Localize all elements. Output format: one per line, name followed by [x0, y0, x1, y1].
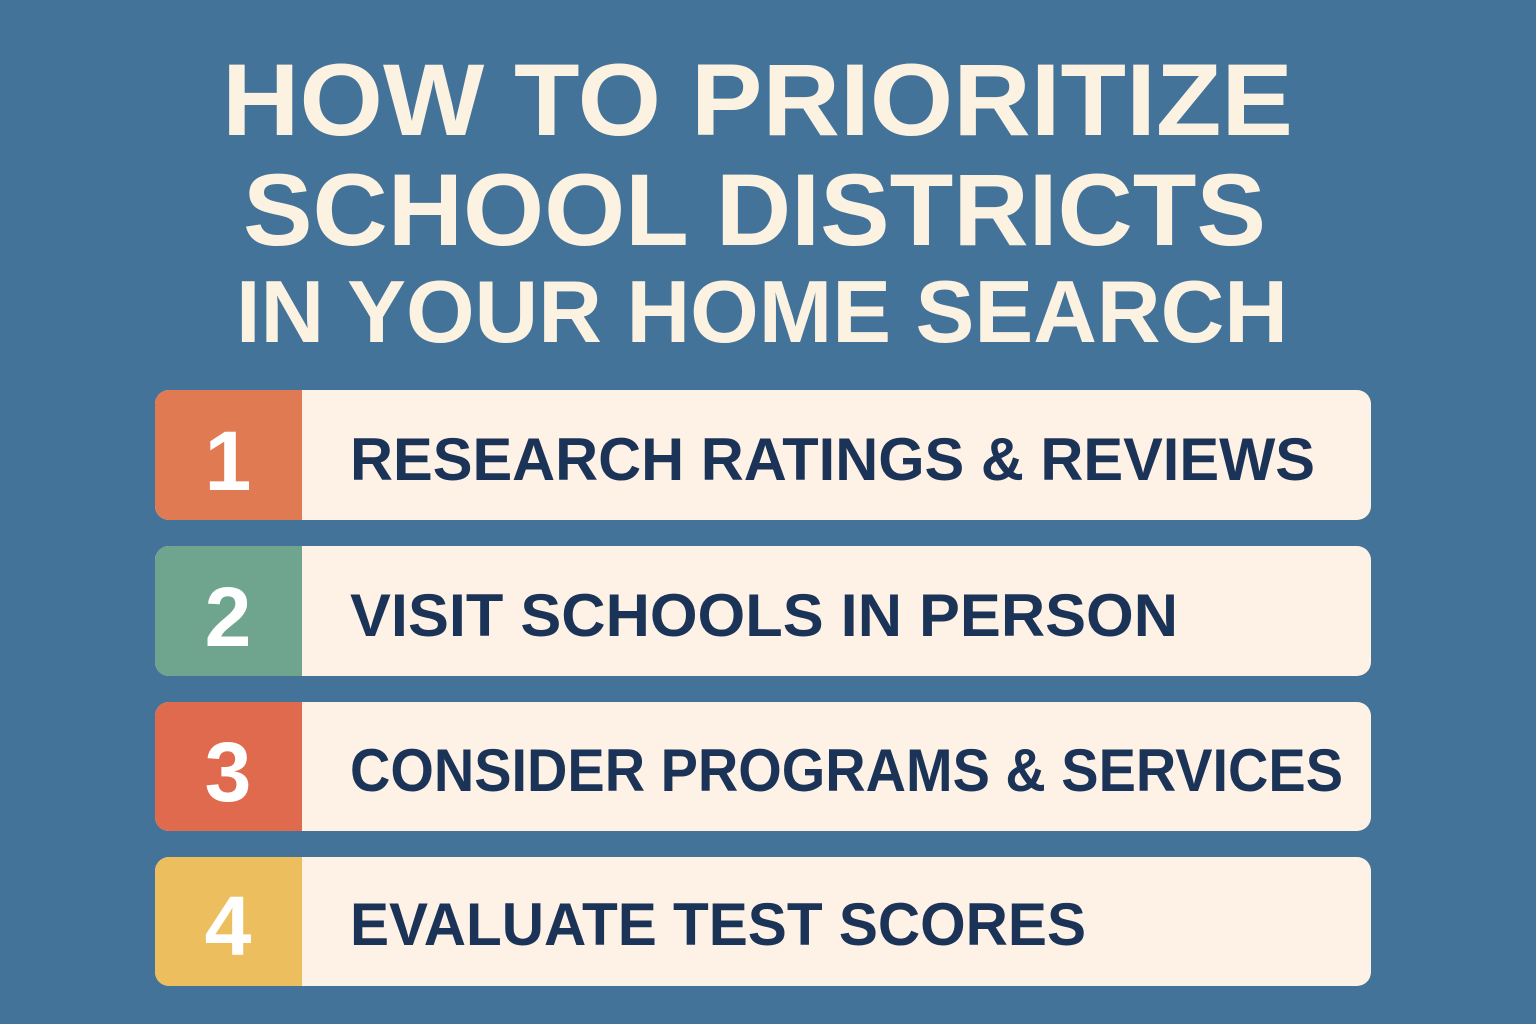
step 2: 2	[205, 570, 251, 664]
step 1	[155, 390, 1371, 520]
step 1: RESEARCH RATINGS & REVIEWS	[350, 426, 1315, 493]
step 1: 1	[205, 414, 251, 508]
title: IN YOUR HOME SEARCH	[236, 262, 1288, 361]
title	[222, 43, 1293, 361]
title: SCHOOL DISTRICTS	[243, 153, 1266, 267]
step 3: CONSIDER PROGRAMS & SERVICES	[350, 737, 1343, 804]
step 2: VISIT SCHOOLS IN PERSON	[350, 582, 1178, 649]
step 3: 3	[205, 725, 251, 819]
step 3	[155, 702, 1371, 831]
step 4	[155, 857, 1371, 986]
step 4: EVALUATE TEST SCORES	[350, 891, 1086, 958]
title: HOW TO PRIORITIZE	[222, 43, 1293, 157]
step 4: 4	[205, 879, 252, 973]
step 2	[155, 546, 1371, 676]
